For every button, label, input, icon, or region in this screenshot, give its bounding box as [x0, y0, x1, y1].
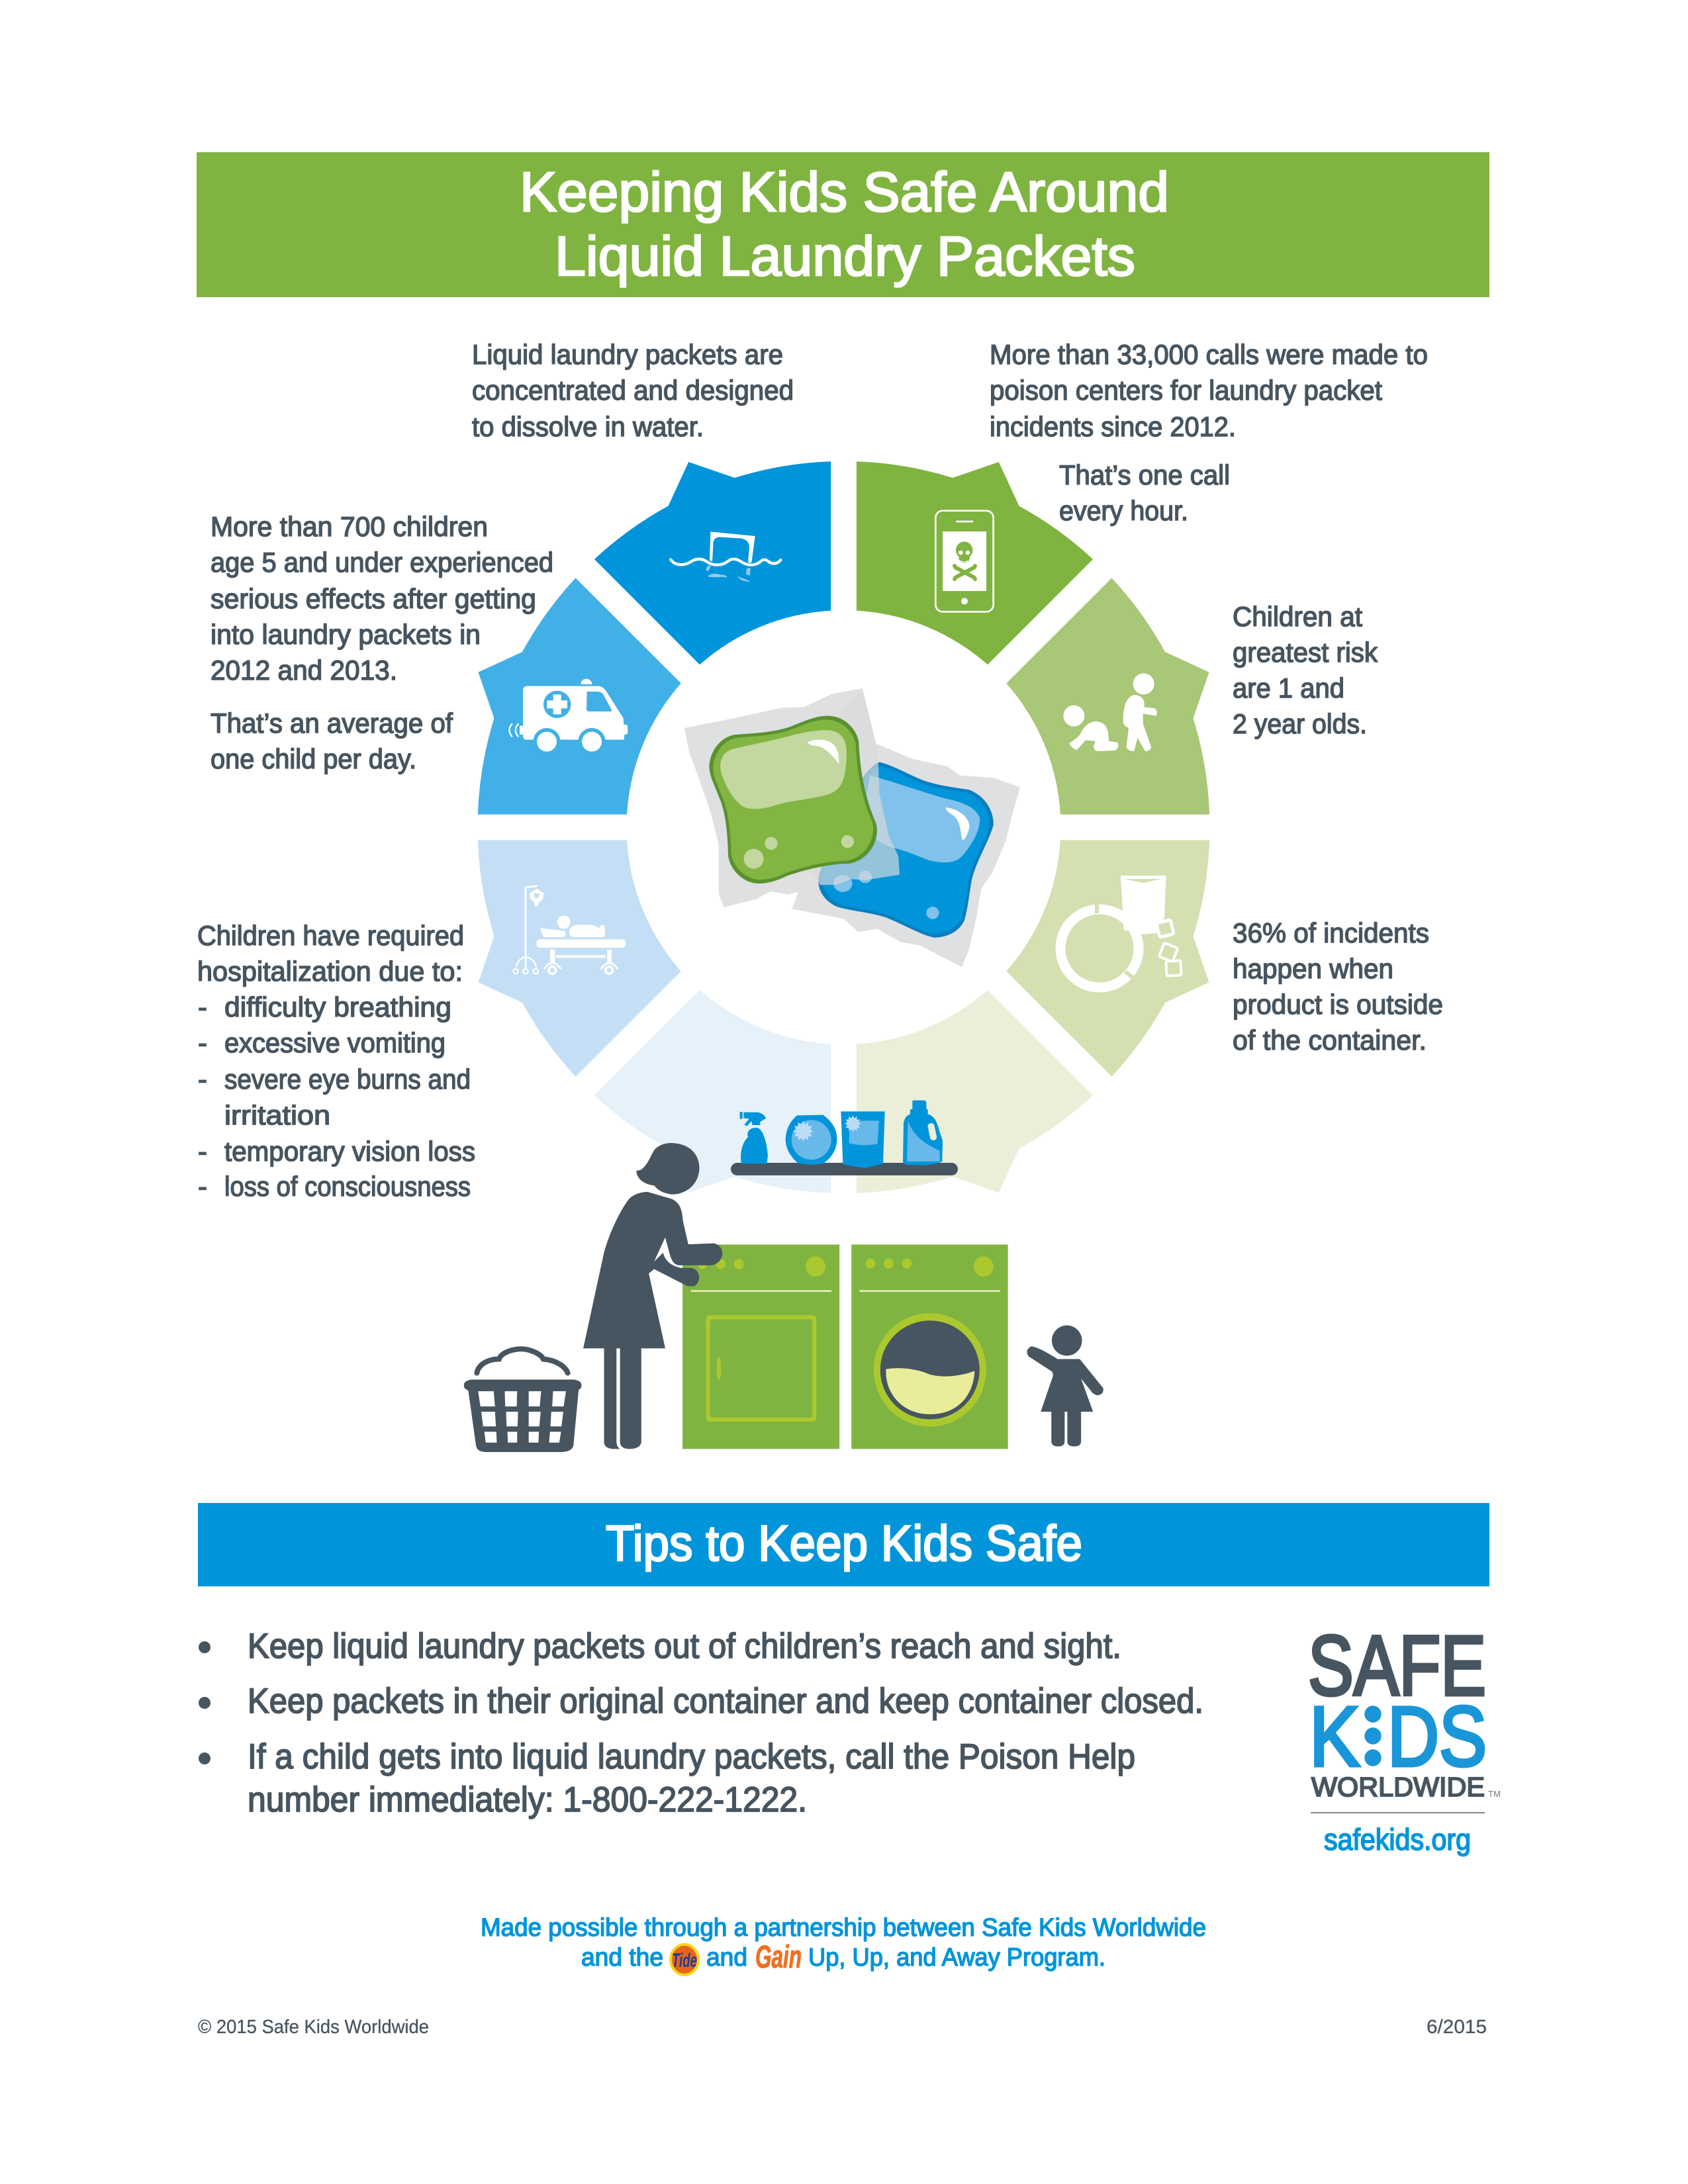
- text: packets concentrated: concentrated and designed: [472, 375, 794, 406]
- segment: top right, dark green: [857, 461, 1093, 664]
- text: hospitalization list: -: [198, 1136, 207, 1167]
- text: poison center calls: incidents since 2012.: [990, 411, 1236, 442]
- green packet wrapper: [684, 688, 877, 907]
- text: hospitalization list: -: [198, 1064, 207, 1095]
- partnership statement: [481, 1914, 1206, 1976]
- text: 36 percent of incidents: 36% of incidents: [1233, 917, 1429, 948]
- segment: right upper, mid green: [1006, 578, 1209, 815]
- text: 700 children: one child per day.: [211, 743, 416, 774]
- wheel of segments: [478, 461, 1209, 1193]
- shelf: [731, 1163, 958, 1175]
- text: hospitalization list: -: [198, 1027, 207, 1058]
- blue packet wrapper: [792, 743, 1020, 967]
- text: poison center calls: every hour.: [1059, 495, 1188, 526]
- title banner: Liquid Laundry Packets: [555, 225, 1135, 287]
- text: packets concentrated: [472, 339, 794, 442]
- tips list: Keep liquid laundry packets out of children’s reach and sight.: [248, 1627, 1121, 1666]
- logo: Safe Kids Worldwide: TM: [1488, 1789, 1501, 1799]
- pouch: [841, 1111, 885, 1168]
- text: greatest risk: Children at: [1233, 601, 1362, 632]
- icon: shelf with household products: [731, 1101, 958, 1175]
- partnership statement: and: [706, 1944, 747, 1972]
- tips list: Keep packets in their original container and keep container closed.: [248, 1682, 1203, 1721]
- title banner: Keeping Kids Safe Around: [520, 161, 1169, 223]
- title banner: [197, 152, 1489, 297]
- text: hospitalization list: loss of consciousness: [224, 1171, 471, 1202]
- text: poison center calls: That’s one call: [1059, 459, 1230, 490]
- spray bottle: [740, 1112, 768, 1163]
- logo: Safe Kids Worldwide: K: [1309, 1690, 1360, 1784]
- logo: Safe Kids Worldwide: WORLDWIDE: [1311, 1772, 1485, 1802]
- text: hospitalization list: [197, 920, 475, 1202]
- logo: Safe Kids Worldwide: DS: [1387, 1690, 1487, 1784]
- text: hospitalization list: severe eye burns and: [224, 1064, 471, 1095]
- text: 700 children: [211, 511, 553, 774]
- text: 700 children: That’s an average of: [211, 707, 453, 739]
- text: 700 children: age 5 and under experienced: [211, 547, 553, 578]
- washer: [851, 1245, 1008, 1449]
- tips list: number immediately: 1-800-222-1222.: [248, 1780, 807, 1819]
- text: greatest risk: 2 year olds.: [1233, 708, 1367, 739]
- icon: ambulance: [509, 679, 628, 755]
- logo: Tide: [669, 1943, 700, 1976]
- icon: packet dissolving in water: [671, 531, 780, 582]
- text: hospitalization list: irritation: [224, 1100, 330, 1130]
- text: hospitalization list: Children have required: [197, 920, 464, 951]
- tips list: [199, 1627, 1203, 1819]
- illustration: laundry packets: [684, 688, 1020, 967]
- partnership statement: Made possible through a partnership between Safe Kids Worldwide: [481, 1914, 1206, 1942]
- tub of pods: [786, 1115, 837, 1165]
- text: hospitalization list: -: [198, 1171, 207, 1202]
- text: greatest risk: are 1 and: [1233, 672, 1344, 704]
- text: greatest risk: greatest risk: [1233, 637, 1378, 668]
- text: poison center calls: poison centers for laundry packet: [990, 375, 1382, 406]
- logo: Gain: Gain: [755, 1940, 802, 1975]
- logo: Tide: Tide: [672, 1950, 697, 1972]
- detergent bottle: [903, 1101, 943, 1165]
- segment: left upper, sky blue: [478, 578, 681, 815]
- text: hospitalization list: temporary vision loss: [224, 1136, 475, 1167]
- date: 6/2015: [1427, 2017, 1487, 2038]
- partnership statement: Up, Up, and Away Program.: [808, 1944, 1105, 1972]
- text: 700 children: More than 700 children: [211, 511, 488, 542]
- icon: phone with skull and crossbones: [935, 511, 994, 612]
- laundry basket: [464, 1349, 581, 1452]
- laundry room scene: [464, 1143, 1103, 1452]
- text: 36 percent of incidents: happen when: [1233, 953, 1393, 984]
- text: 700 children: into laundry packets in: [211, 619, 481, 650]
- segment: bottom right, faint green: [857, 990, 1093, 1193]
- dryer: [682, 1245, 839, 1449]
- logo: Safe Kids Worldwide: SAFE: [1308, 1619, 1486, 1713]
- text: hospitalization list: excessive vomiting: [224, 1027, 445, 1058]
- text: 36 percent of incidents: [1233, 917, 1443, 1056]
- text: hospitalization list: difficulty breathing: [224, 991, 451, 1023]
- segment: right lower, pale green: [1006, 840, 1209, 1077]
- text: greatest risk: [1233, 601, 1378, 739]
- icon: crawling and walking toddlers: [1063, 673, 1157, 751]
- text: 700 children: serious effects after getting: [211, 583, 536, 614]
- text: poison center calls: [990, 339, 1428, 526]
- text: 700 children: 2012 and 2013.: [211, 655, 397, 686]
- text: packets concentrated: Liquid laundry packets are: [472, 339, 783, 370]
- logo: Safe Kids Worldwide: [1308, 1619, 1501, 1856]
- text: packets concentrated: to dissolve in water.: [472, 411, 704, 442]
- blue pod: [818, 762, 994, 938]
- logo: Safe Kids Worldwide: safekids.org: [1324, 1823, 1471, 1856]
- icon: packet outside container: [1060, 876, 1182, 987]
- text: 36 percent of incidents: of the container.: [1233, 1024, 1427, 1056]
- partnership statement: and the: [581, 1944, 663, 1972]
- text: hospitalization list: -: [198, 991, 207, 1023]
- tips list: If a child gets into liquid laundry packets, call the Poison Help: [248, 1737, 1135, 1776]
- green pod: [709, 716, 877, 884]
- icon: hospital bed and IV stand: [513, 886, 626, 974]
- segment: bottom left, faint blue: [594, 990, 831, 1193]
- text: hospitalization list: hospitalization due to:: [197, 956, 463, 987]
- woman silhouette: [583, 1143, 722, 1449]
- text: poison center calls: More than 33,000 calls were made to: [990, 339, 1428, 370]
- copyright: © 2015 Safe Kids Worldwide: [198, 2017, 429, 2038]
- text: 36 percent of incidents: product is outside: [1233, 989, 1443, 1020]
- tips banner: Tips to Keep Kids Safe: [606, 1516, 1082, 1572]
- tips banner: [198, 1503, 1489, 1586]
- segment: top left, strong blue: [594, 461, 831, 664]
- segment: left lower, pale blue: [478, 840, 681, 1077]
- child silhouette: [1027, 1326, 1103, 1447]
- translucent wrapper overlap: [780, 688, 900, 885]
